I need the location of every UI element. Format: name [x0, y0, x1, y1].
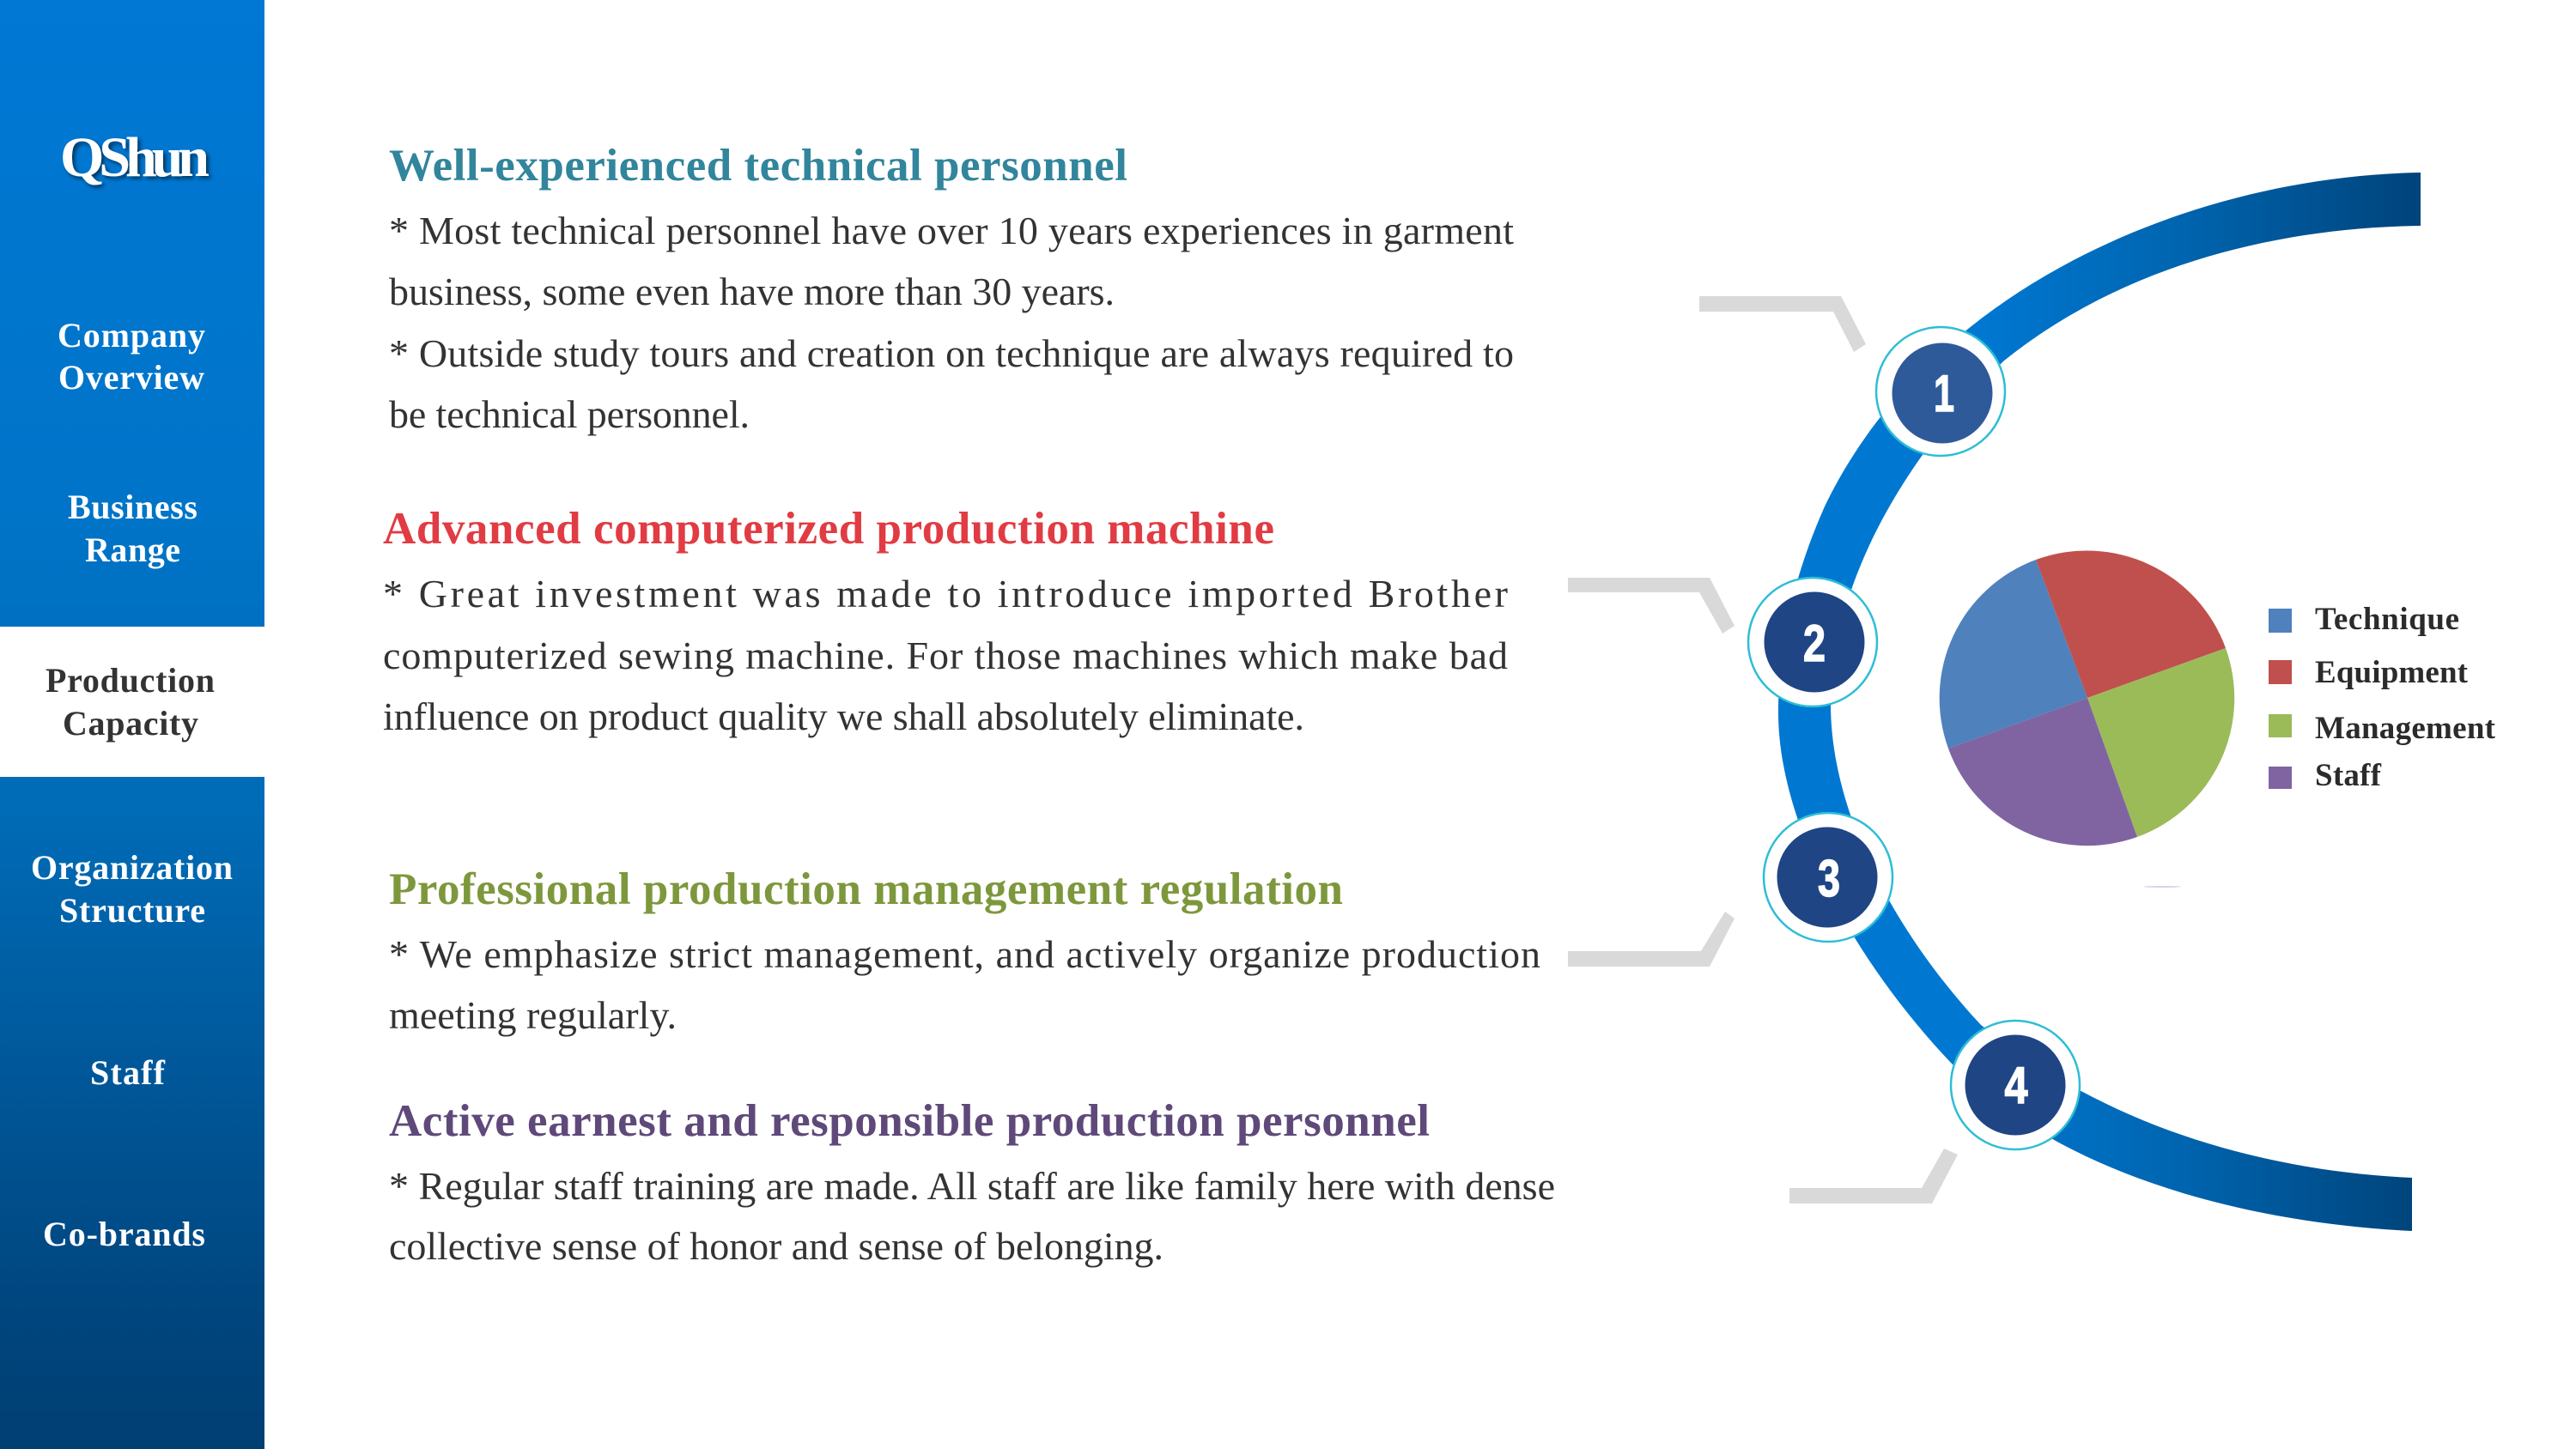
text block: well-experienced technical personnel: * Most technical personnel have over 10 years experiences in garment [389, 209, 1514, 252]
nav item: Business Range [68, 488, 197, 569]
nav item: Organization Structure: Structure [59, 891, 205, 930]
heading: Well-experienced technical personnel [389, 141, 1127, 191]
text block: well-experienced technical personnel [389, 141, 1514, 436]
text block: active earnest and responsible production personnel [389, 1096, 1555, 1268]
badge: number 4: 4 [2004, 1057, 2028, 1114]
badge: number 2: 2 [1803, 615, 1826, 672]
heading: Advanced computerized production machine [383, 504, 1274, 554]
panel: sidebar navigation [0, 0, 264, 1449]
nav item: Business Range: Range [85, 530, 180, 569]
nav item: Co-brands: Co-brands [43, 1215, 205, 1253]
active tab background [0, 627, 264, 777]
nav item: Company Overview [58, 316, 205, 397]
nav item: Organization Structure [31, 848, 233, 930]
text block: well-experienced technical personnel: * Outside study tours and creation on technique are always required to [389, 331, 1514, 375]
arc: blue curved band [1778, 173, 2421, 1231]
legend: Technique: Technique [2315, 602, 2459, 637]
badge: number 4 [1951, 1021, 2080, 1149]
nav item: Organization Structure: Organization [31, 848, 233, 887]
legend: Staff: Staff [2315, 758, 2382, 793]
text block: professional production management regulation [389, 864, 1540, 1037]
heading: Professional production management regulation [389, 864, 1343, 914]
pie chart [1940, 550, 2234, 846]
text block: well-experienced technical personnel: be technical personnel. [389, 392, 750, 436]
badge: number 3: 3 [1818, 850, 1840, 907]
text block: advanced computerized production machine: * Great investment was made to introduce imported Brother [383, 572, 1508, 615]
connector: item 3 [1568, 912, 1735, 967]
text block: advanced computerized production machine [383, 504, 1508, 738]
nav item: Production Capacity (active) [46, 661, 215, 743]
legend: Equipment: Equipment [2315, 655, 2469, 690]
badge: number 2 [1748, 578, 1877, 706]
badge: number 1: 1 [1934, 365, 1954, 422]
logo: QShun: QShun [60, 126, 210, 189]
nav item: Production Capacity (active): Production [46, 661, 215, 700]
legend: Staff [2269, 758, 2382, 793]
text block: professional production management regulation: * We emphasize strict management, and actively organize production [389, 932, 1540, 976]
badge: number 1 [1876, 327, 2005, 456]
text block: well-experienced technical personnel: business, some even have more than 30 years. [389, 270, 1115, 313]
legend [2269, 602, 2496, 793]
badge: number 3 [1764, 813, 1893, 942]
text block: active earnest and responsible production personnel: * Regular staff training are made. All staff are like family here with dense [389, 1164, 1555, 1208]
nav item: Business Range: Business [68, 488, 197, 526]
connector: item 4 [1789, 1149, 1958, 1203]
heading: Active earnest and responsible production personnel [389, 1096, 1430, 1146]
nav item: Staff: Staff [90, 1053, 166, 1092]
text block: advanced computerized production machine: influence on product quality we shall absolutely eliminate. [383, 694, 1304, 738]
nav item: Company Overview: Company [58, 316, 205, 355]
nav item: Company Overview: Overview [58, 358, 204, 397]
text block: active earnest and responsible production personnel: collective sense of honor and sense of belonging. [389, 1224, 1163, 1268]
connector: item 2 [1568, 578, 1735, 634]
text block: advanced computerized production machine: computerized sewing machine. For those machines which make bad [383, 634, 1508, 677]
legend: Management: Management [2315, 711, 2496, 746]
connector: item 1 [1699, 296, 1866, 352]
nav item: Production Capacity (active): Capacity [63, 704, 198, 743]
text block: professional production management regulation: meeting regularly. [389, 993, 677, 1037]
